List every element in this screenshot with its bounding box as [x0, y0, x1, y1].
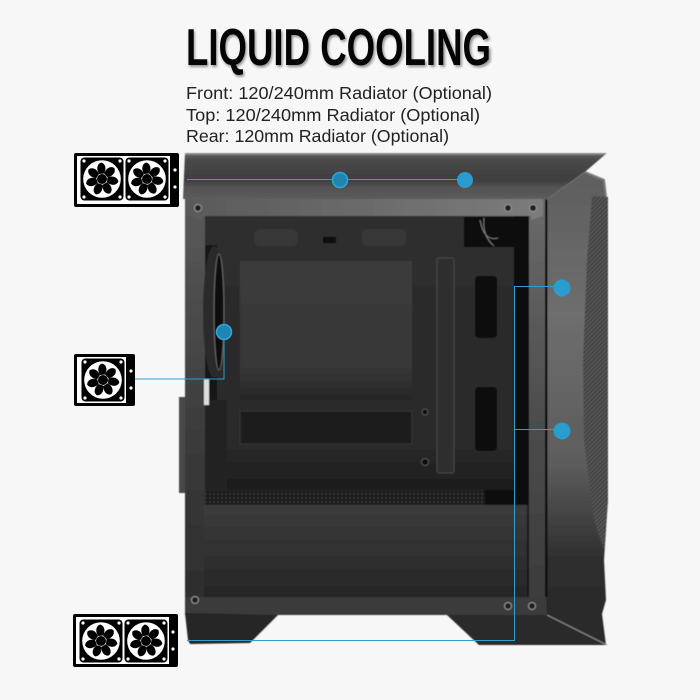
front panel hatched edge — [583, 196, 608, 550]
top radiator icon (240mm) — [74, 153, 179, 207]
expansion slots — [205, 400, 227, 490]
right rail — [529, 199, 545, 615]
case body — [185, 199, 547, 615]
top cutouts — [254, 229, 298, 246]
description text: Rear: 120mm Radiator (Optional) — [186, 126, 449, 146]
description text: Top: 120/240mm Radiator (Optional) — [186, 105, 480, 125]
cable bars — [437, 258, 454, 473]
front panel — [547, 172, 608, 645]
rear radiator icon (120mm) — [74, 354, 135, 406]
PSU shroud mesh — [205, 490, 485, 505]
title — [186, 19, 493, 79]
rear radiator callout line and dot — [135, 324, 232, 379]
right interior — [514, 216, 529, 490]
left rail — [185, 199, 205, 615]
motherboard tray — [240, 261, 412, 400]
bottom frame bar — [185, 597, 547, 615]
rear fan — [203, 245, 225, 400]
rear bracket — [179, 397, 186, 493]
top panel — [183, 153, 607, 199]
description text: Front: 120/240mm Radiator (Optional) — [186, 83, 492, 103]
interior — [205, 216, 529, 598]
title: LIQUID COOLING — [187, 21, 493, 79]
front radiator callout lines and dots — [187, 280, 570, 640]
description text — [186, 83, 492, 146]
PC case illustration — [179, 153, 608, 645]
foot — [185, 613, 278, 644]
top radiator callout line and dots — [187, 172, 473, 188]
screws — [192, 204, 536, 610]
front radiator icon (240mm) — [73, 614, 178, 667]
top frame bar — [188, 199, 543, 220]
title: LIQUID COOLING — [186, 19, 491, 77]
PSU shroud — [204, 505, 527, 597]
